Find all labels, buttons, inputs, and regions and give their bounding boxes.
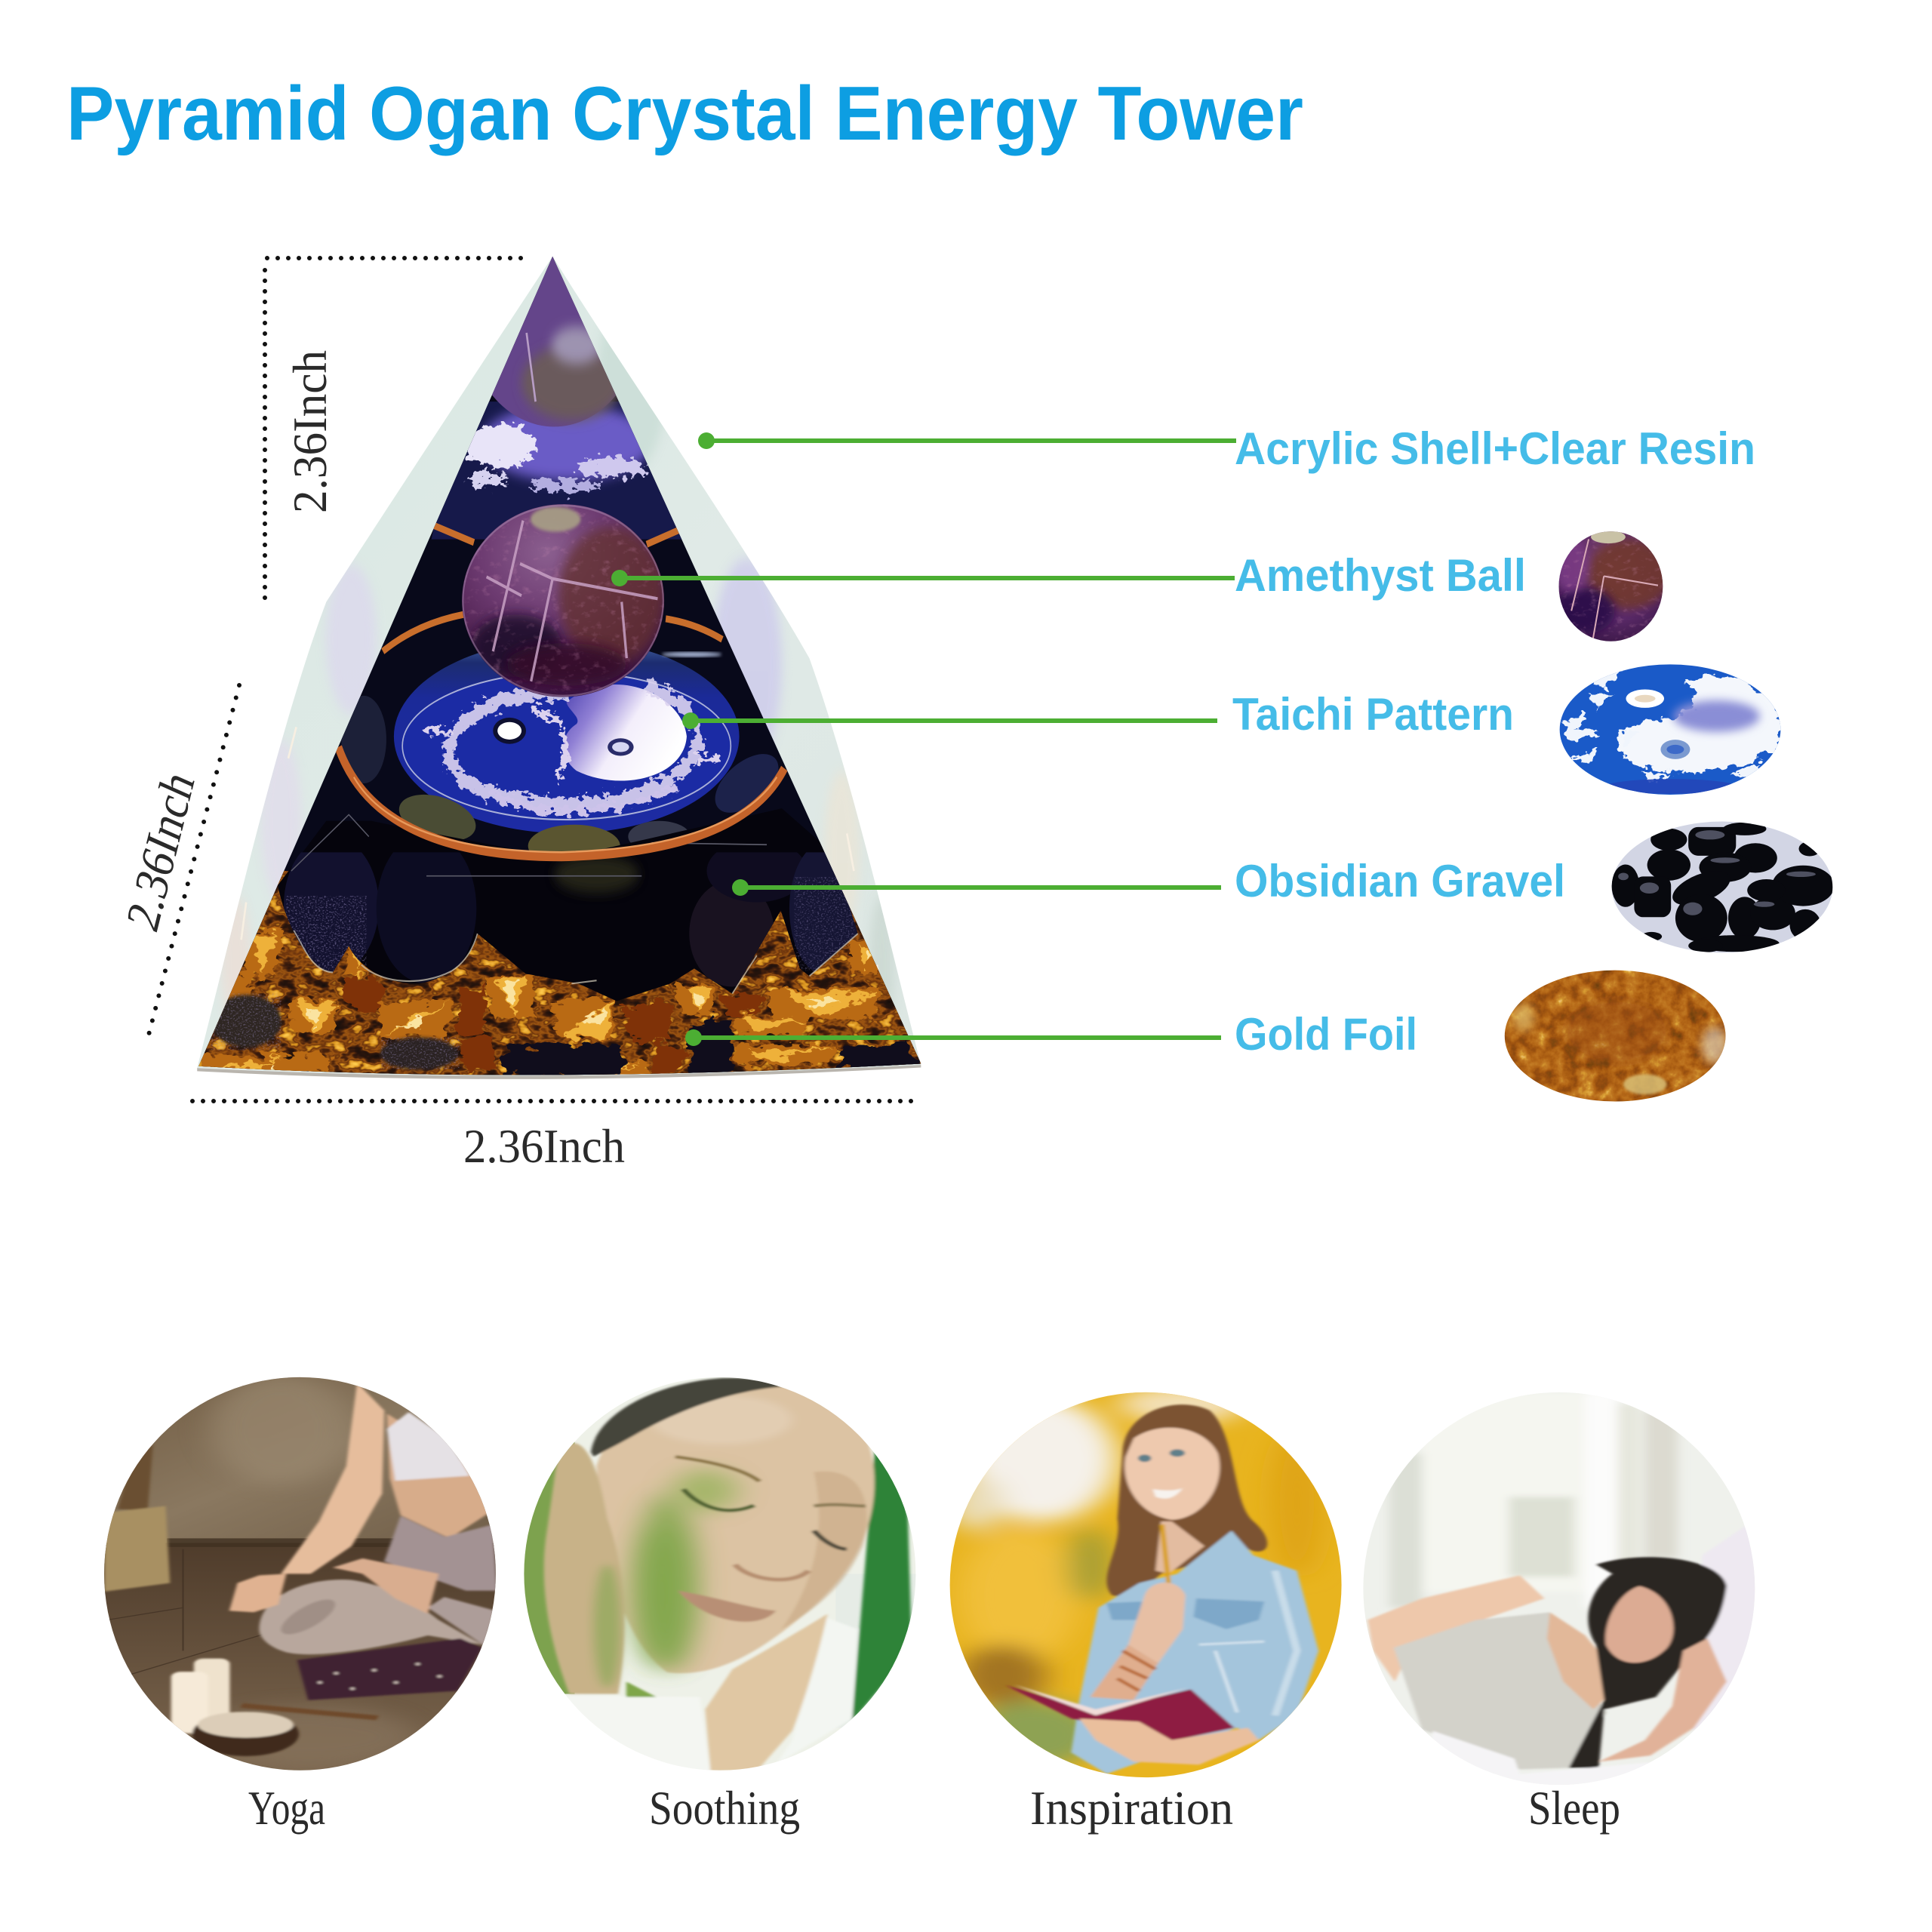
dimension: side dotted line	[148, 685, 239, 1038]
dimension label: height: 2.36Inch	[283, 350, 337, 513]
gold foil layer	[198, 871, 921, 1075]
foil shards	[202, 931, 921, 1078]
copper ring front	[338, 747, 784, 857]
thumbnail: obsidian gravel	[1612, 821, 1832, 952]
callout: amethyst ball: Amethyst Ball	[1235, 550, 1526, 601]
title: Pyramid Ogan Crystal Energy Tower	[66, 72, 1303, 156]
material thumbnails	[1502, 528, 1840, 1105]
dimension label: base: 2.36Inch	[463, 1119, 625, 1173]
taichi disc	[394, 639, 740, 833]
photos row, right pair	[943, 1386, 1759, 1789]
caption: yoga: Yoga	[248, 1781, 325, 1835]
callout: obsidian gravel: Obsidian Gravel	[1235, 856, 1565, 906]
photo: sleep	[1362, 1389, 1759, 1789]
callout: acrylic shell	[698, 423, 1755, 474]
caption: soothing: Soothing	[649, 1781, 800, 1835]
callout: obsidian gravel	[732, 856, 1565, 906]
acrylic shell	[198, 257, 921, 1076]
black obsidian stones	[278, 808, 860, 1001]
dimension: height dotted line	[263, 270, 267, 602]
caption: inspiration: Inspiration	[1030, 1781, 1233, 1835]
caption: sleep: Sleep	[1528, 1781, 1620, 1835]
amethyst ball	[462, 504, 664, 697]
photo: soothing	[515, 1374, 928, 1774]
callout: gold foil	[685, 1009, 1417, 1060]
photo: yoga	[91, 1374, 515, 1777]
copper ring back	[383, 525, 722, 651]
callout: taichi pattern: Taichi Pattern	[1232, 689, 1514, 740]
dimension: top dotted line	[267, 256, 525, 260]
photo: inspiration	[943, 1386, 1352, 1780]
callout: amethyst ball	[611, 550, 1526, 601]
callout: acrylic shell: Acrylic Shell+Clear Resin	[1235, 423, 1755, 474]
dimension label: side: 2.36Inch	[117, 763, 205, 939]
amethyst reflection top	[492, 257, 620, 429]
pyramid illustration	[197, 257, 921, 1079]
dark glitter patches	[211, 995, 281, 1048]
dimension: base dotted line	[192, 1099, 919, 1103]
dark inner face	[198, 257, 921, 1075]
bottom lip shadow	[197, 1065, 921, 1079]
clouded blue reflection	[432, 401, 687, 540]
thumbnail: taichi pattern	[1559, 664, 1781, 795]
photos row, left pair	[91, 1374, 928, 1777]
callout: taichi pattern	[682, 689, 1514, 740]
small glitter stones on the ring	[341, 696, 786, 867]
callout: gold foil: Gold Foil	[1235, 1009, 1417, 1060]
thumbnail: gold foil	[1502, 967, 1732, 1105]
thumbnail: amethyst ball	[1559, 531, 1663, 641]
